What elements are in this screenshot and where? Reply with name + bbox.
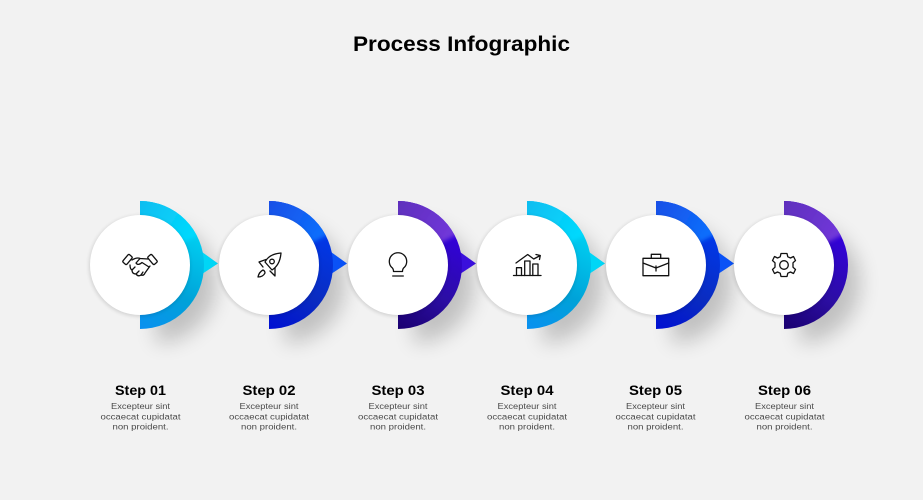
step 2 text: occaecat cupidatat bbox=[229, 411, 310, 421]
step 1 text: occaecat cupidatat bbox=[100, 411, 181, 421]
step 3 text: Step 03 bbox=[372, 383, 425, 398]
step 2 text bbox=[229, 383, 310, 432]
step 4 node bbox=[476, 193, 605, 329]
step 6 text: Excepteur sint bbox=[755, 401, 815, 411]
step 1 node bbox=[90, 193, 218, 329]
step 4 text: non proident. bbox=[499, 422, 555, 432]
step 4 text: Excepteur sint bbox=[498, 401, 557, 411]
drop shadows bbox=[156, 223, 860, 343]
step 2 text: Step 02 bbox=[242, 383, 296, 398]
icon: handshake bbox=[122, 254, 158, 276]
step 2 text: non proident. bbox=[241, 422, 297, 432]
step 1 text: Step 01 bbox=[115, 383, 167, 398]
step 6 text: occaecat cupidatat bbox=[744, 411, 825, 421]
step 3 text: occaecat cupidatat bbox=[358, 411, 439, 421]
icon: briefcase bbox=[643, 254, 669, 276]
step 6 text: non proident. bbox=[756, 422, 812, 432]
icon: growth chart bbox=[514, 254, 541, 276]
step 1 text bbox=[100, 383, 181, 432]
icon: light bulb bbox=[389, 253, 407, 276]
icon: gear bbox=[772, 254, 796, 276]
step 4 text: occaecat cupidatat bbox=[487, 411, 568, 421]
step 3 node bbox=[348, 193, 476, 329]
step 3 text: Excepteur sint bbox=[368, 401, 428, 411]
icon: rocket bbox=[258, 253, 281, 277]
step 6 node bbox=[732, 201, 848, 329]
step 5 text: occaecat cupidatat bbox=[616, 411, 696, 421]
step 1 text: non proident. bbox=[112, 422, 168, 432]
step 1 text: Excepteur sint bbox=[111, 401, 171, 411]
step 6 text bbox=[744, 383, 825, 432]
step 4 text bbox=[487, 383, 568, 432]
step 5 node bbox=[606, 193, 734, 329]
step 3 text bbox=[358, 383, 439, 432]
step 3 text: non proident. bbox=[370, 422, 426, 432]
step 2 text: Excepteur sint bbox=[240, 401, 299, 411]
step 5 text: Step 05 bbox=[629, 383, 683, 398]
step 4 text: Step 04 bbox=[500, 383, 554, 398]
title: Process Infographic bbox=[353, 33, 570, 56]
step 5 text bbox=[616, 383, 696, 432]
step 6 text: Step 06 bbox=[758, 383, 812, 398]
step 2 node bbox=[218, 193, 347, 329]
step 5 text: Excepteur sint bbox=[626, 401, 686, 411]
step 5 text: non proident. bbox=[628, 422, 684, 432]
